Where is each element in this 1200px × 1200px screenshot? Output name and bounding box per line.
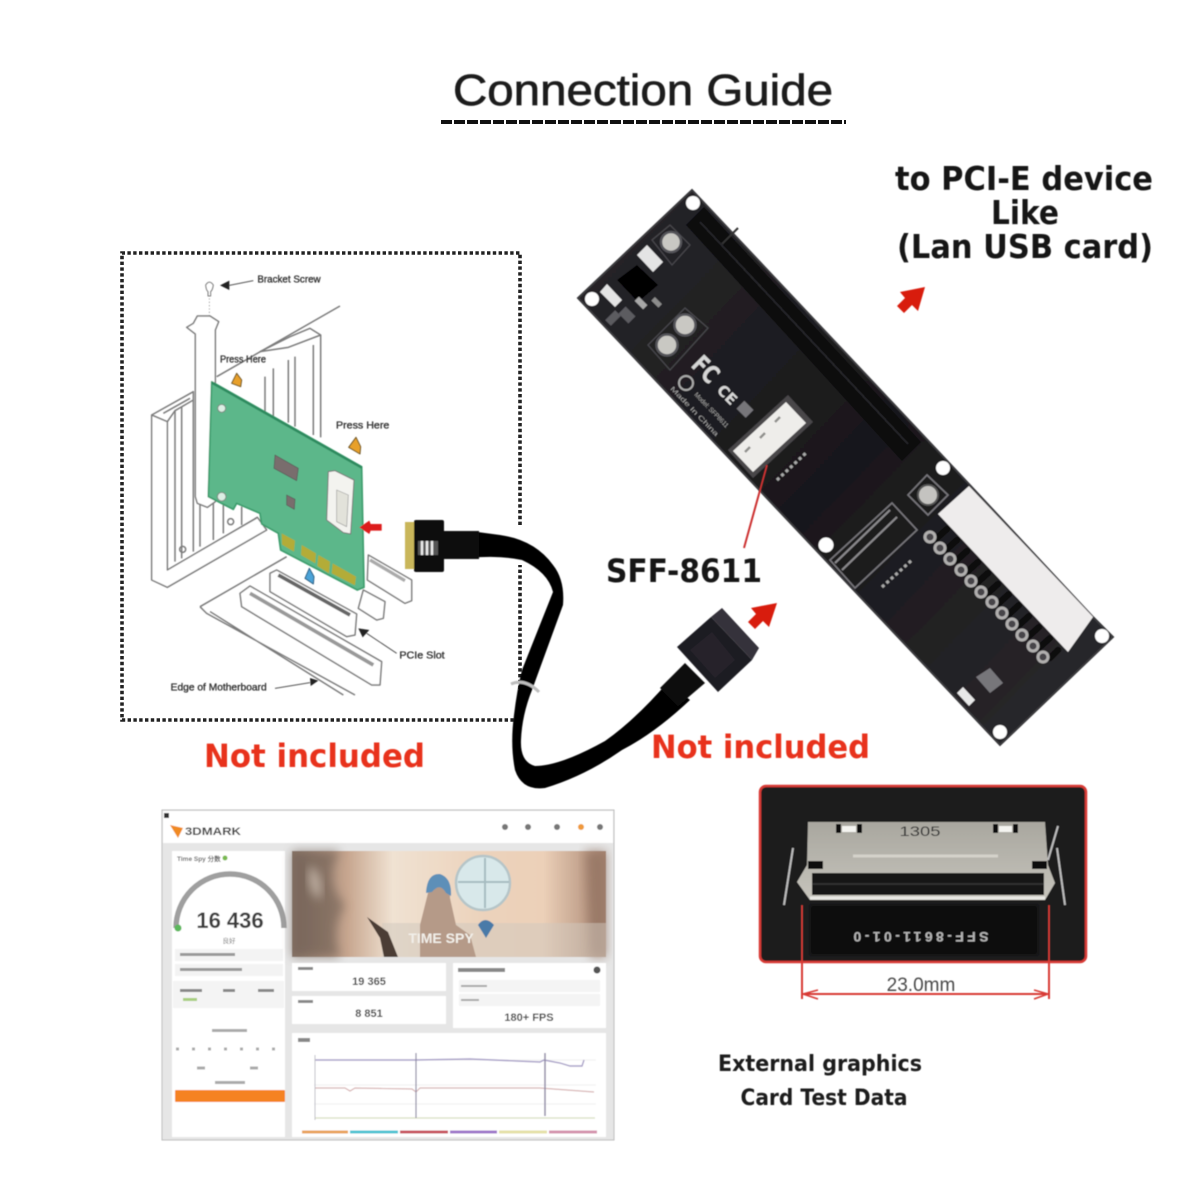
app header: 3DMARK (185, 826, 241, 838)
hero image: Time Spy (292, 851, 606, 957)
score panel (172, 851, 285, 1137)
panel: SFF-8611 connector close-up (760, 786, 1086, 962)
stat card: graphics score: 19 365 (352, 976, 386, 988)
panel: SFF-8611 connector close-up: 1305 (900, 823, 941, 839)
small parts (605, 297, 662, 326)
stat card: CPU score (292, 996, 446, 1024)
hero image: Time Spy: TIME SPY (408, 930, 474, 946)
diagram labels: Press Here (220, 355, 266, 366)
red arrow into card (359, 521, 382, 534)
certification marks: Model: SFP8611 (693, 392, 730, 430)
green PCB (208, 382, 364, 590)
score panel: 良好 (222, 936, 236, 945)
M.2 footprint (830, 503, 917, 588)
diagram labels: Bracket Screw (257, 275, 321, 286)
illustration: chassis and card (152, 275, 445, 695)
label: PCI-E device: (Lan USB card) (897, 227, 1153, 266)
score panel: 16 436 (196, 908, 264, 933)
silkscreen label (777, 452, 912, 587)
press icons (232, 373, 242, 387)
diagram labels: Press Here (336, 421, 390, 432)
mounting holes (585, 196, 1109, 739)
stat card: estimated FPS (453, 963, 606, 1028)
panel: PCIe card installation diagram (122, 253, 520, 720)
label: PCI-E device: Like (991, 193, 1059, 232)
dotted frame (122, 253, 520, 720)
label: not included right: Not included (651, 728, 870, 766)
leader lines (229, 281, 397, 688)
photo background (760, 786, 1086, 962)
score panel: Time Spy 分数 (177, 854, 221, 863)
connector shell (797, 822, 1055, 900)
caption: external graphics card test data (718, 1052, 922, 1111)
solder pins (937, 529, 1058, 658)
stat card: estimated FPS: 180+ FPS (504, 1012, 554, 1024)
screw (206, 282, 213, 296)
cable clip (511, 682, 539, 692)
chassis rear frame (152, 306, 340, 587)
figure (420, 880, 476, 957)
stat card: graphics score (292, 963, 446, 991)
diagram labels: Edge of Motherboard (171, 683, 267, 694)
certification marks: FC (686, 350, 725, 389)
regulator chip (617, 265, 658, 302)
mounting bracket (187, 316, 219, 507)
stat card: CPU score: 8 851 (355, 1008, 383, 1020)
certification marks: CE (713, 381, 741, 409)
label: SFF-8611: SFF-8611 (606, 552, 762, 590)
white SAS socket on card (327, 471, 354, 534)
caption: external graphics card test data: External graphics (718, 1052, 922, 1077)
gold fingers (282, 533, 356, 585)
dimension: 23.0mm: 23.0mm (887, 975, 955, 996)
cable body (470, 531, 690, 788)
power button (908, 475, 948, 515)
diagram labels: PCIe Slot (399, 651, 445, 662)
24-pin connector (938, 486, 1093, 652)
app header (163, 811, 613, 843)
certification marks: Made In China (669, 386, 720, 438)
gauge (176, 874, 284, 928)
PCB base (578, 190, 1113, 745)
SFF-8611 socket (728, 395, 813, 478)
certification marks (669, 350, 753, 438)
orange button (175, 1090, 285, 1102)
panel: SFF-8611 connector close-up: SFF-8611-01-0 (853, 929, 988, 945)
PCI-E adapter board (578, 190, 1113, 745)
label: PCI-E device: to PCI-E device (895, 159, 1153, 198)
label: not included left: Not included (204, 737, 425, 775)
chips (274, 455, 298, 509)
arrow: cable into board (748, 603, 777, 629)
label: PCI-E device (895, 159, 1153, 266)
dimension: 23.0mm (802, 905, 1049, 999)
panel: 3DMark screenshot (162, 810, 614, 1140)
legend bars (302, 1130, 597, 1134)
cable: SFF-8654 to SFF-8611 (405, 520, 759, 788)
left plug (405, 520, 479, 572)
title: Connection Guide (453, 66, 833, 115)
lower SMD parts (957, 687, 975, 706)
right plug (660, 608, 759, 706)
leads (784, 826, 1065, 905)
caption: external graphics card test data: Card Test Data (740, 1086, 908, 1111)
leader: SFF-8611 (744, 465, 767, 548)
monitoring chart (292, 1033, 606, 1137)
motherboard slots (200, 555, 412, 695)
capacitors (652, 225, 690, 265)
arrow: to PCI-E device (897, 287, 925, 313)
PCIe slot (686, 207, 921, 461)
diagram labels (171, 275, 445, 694)
latches (808, 824, 1047, 869)
board marking (810, 905, 1038, 955)
PCB holes (217, 404, 226, 501)
